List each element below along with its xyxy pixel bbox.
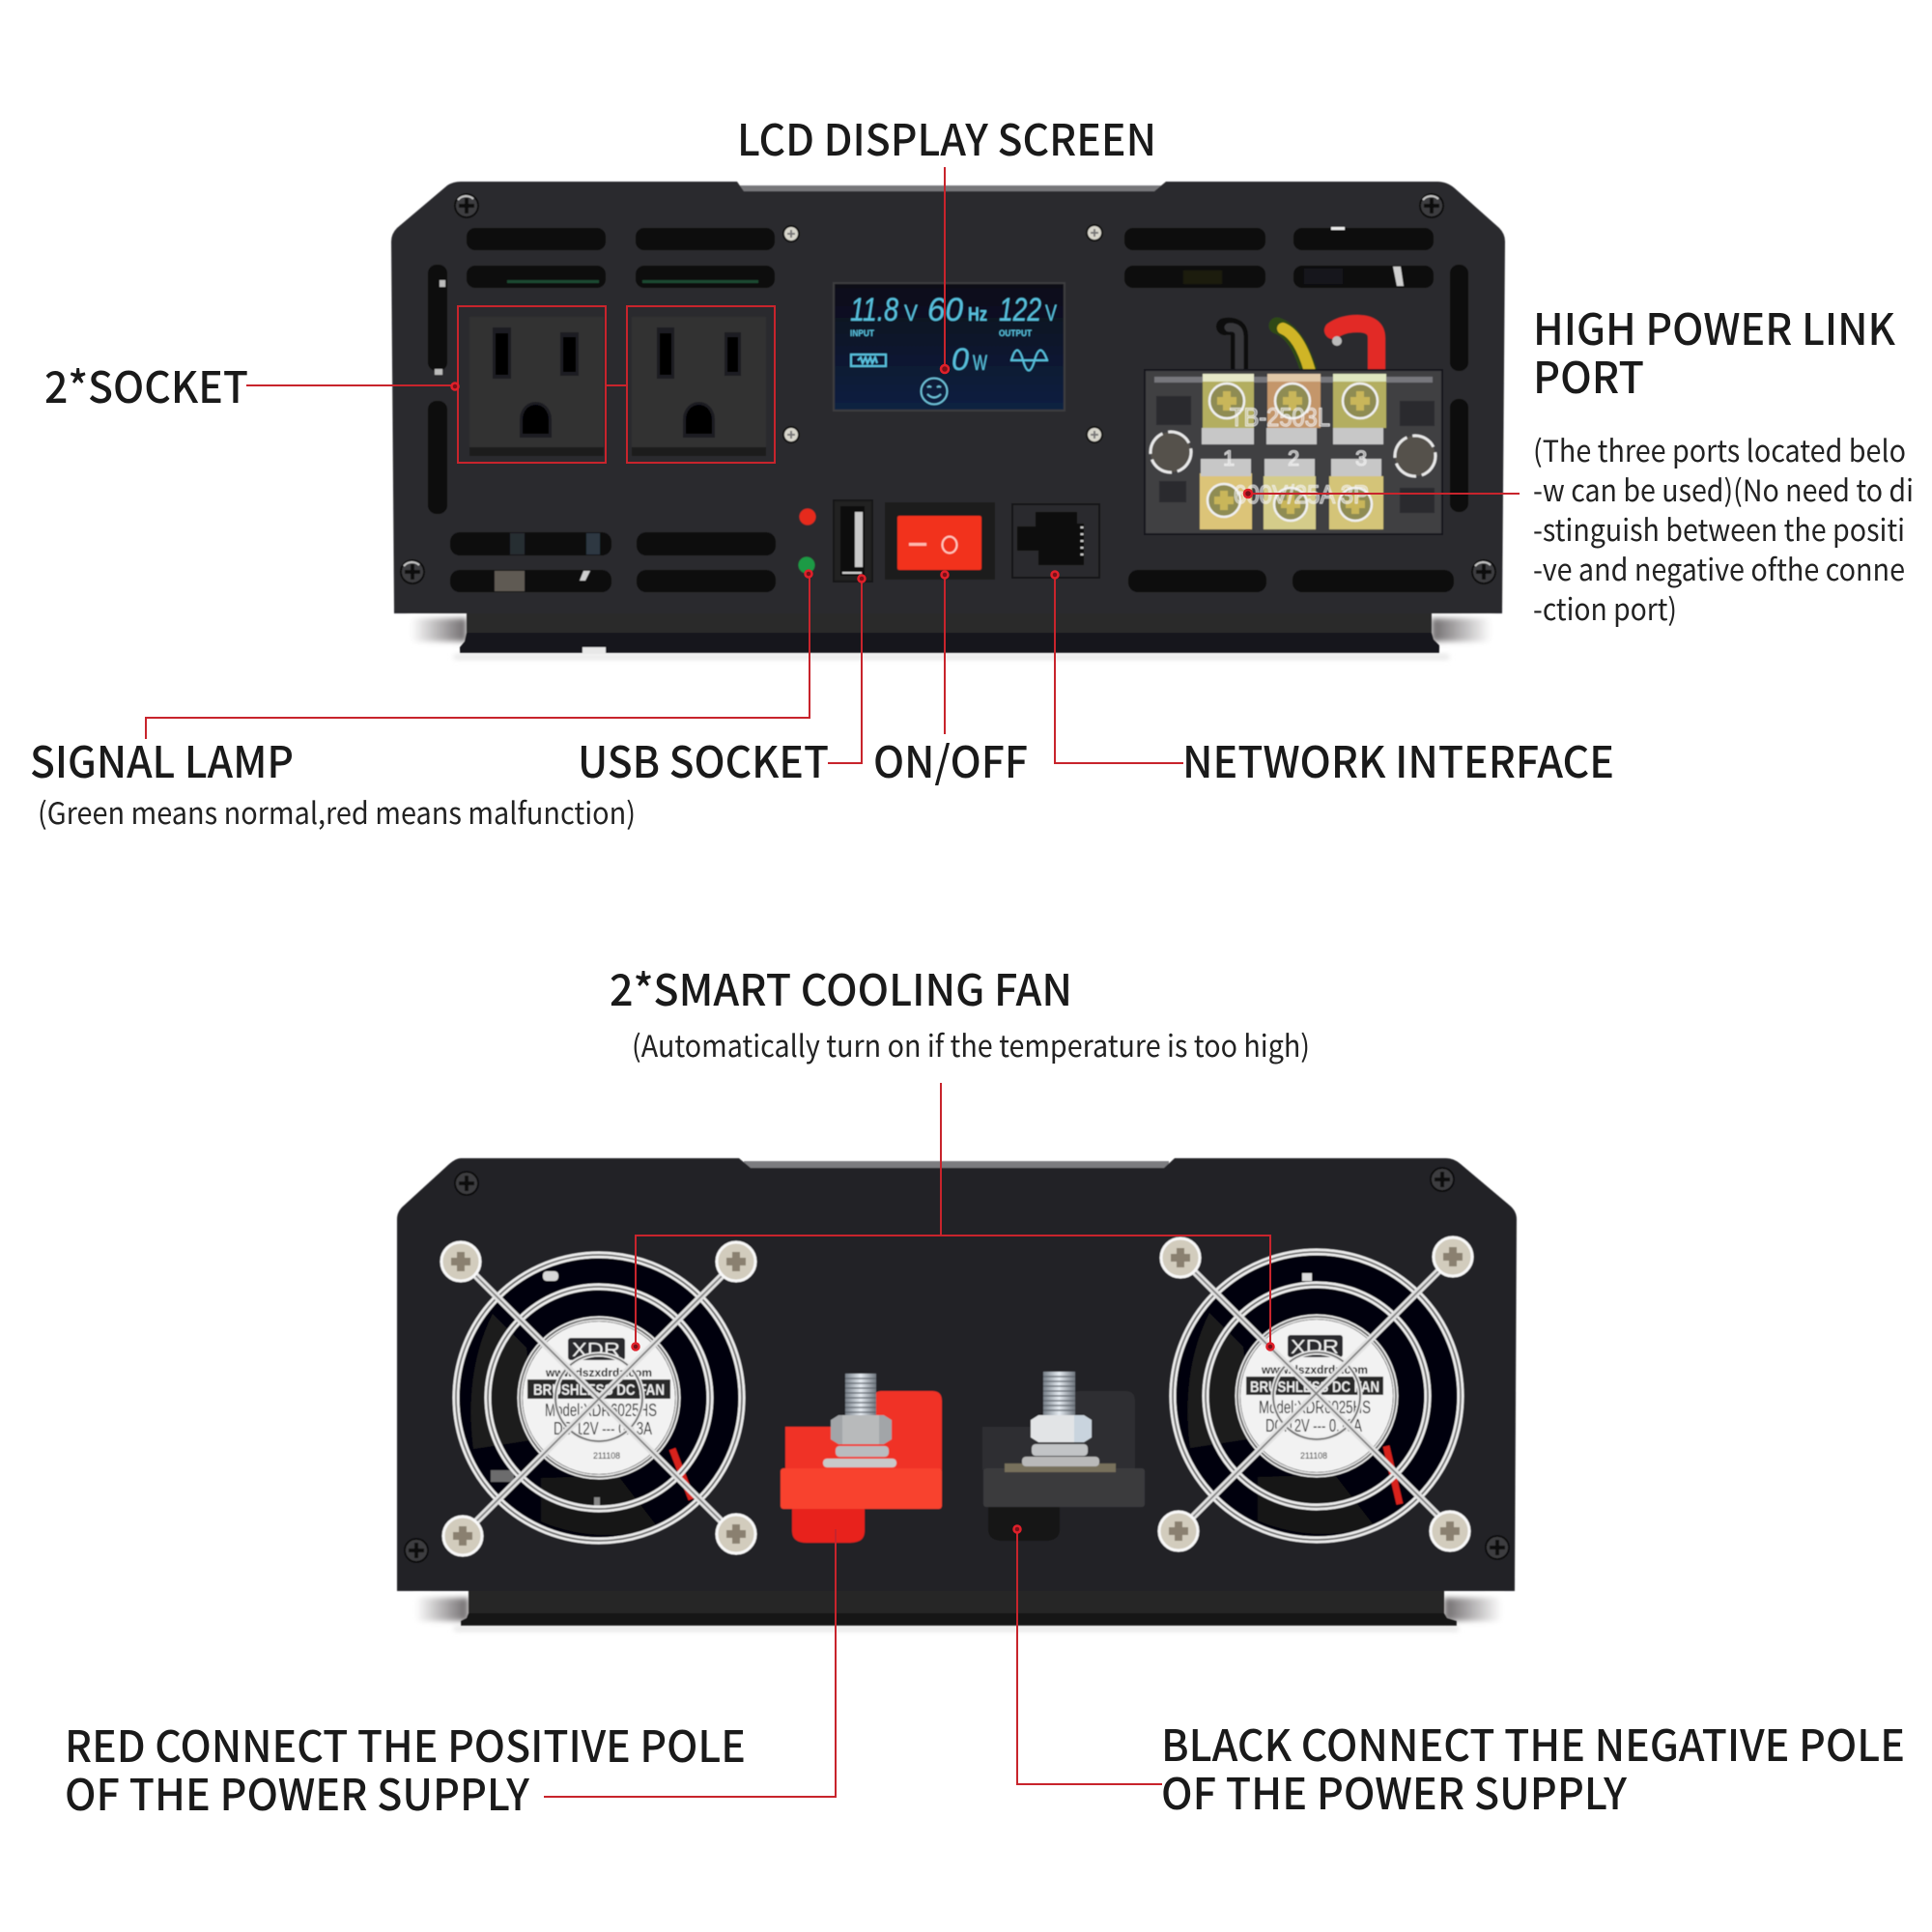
label: positive pole	[65, 1712, 746, 1823]
fan label text: XDR	[1291, 1337, 1339, 1358]
fan hub label	[523, 1321, 675, 1474]
red fan wire	[672, 1449, 692, 1499]
rear plate	[397, 1158, 1517, 1591]
note: high power link port: (The three ports located belo	[1533, 427, 1906, 470]
label: positive pole: RED CONNECT THE POSITIVE POLE	[65, 1712, 746, 1775]
cooling fan right	[1159, 1237, 1472, 1550]
label: USB socket: USB SOCKET	[578, 727, 829, 790]
fan guard wires	[473, 1273, 724, 1524]
label: high power link port	[1533, 295, 1895, 406]
LCD readings: OUTPUT	[999, 328, 1032, 338]
label: negative pole	[1161, 1711, 1905, 1822]
network port	[1012, 504, 1099, 578]
fan label text: BRUSHLESS DC FAN	[533, 1382, 665, 1399]
LCD readings: V	[904, 300, 918, 327]
fan label text: DC:12V --- 0.13A	[554, 1419, 652, 1438]
fan blades	[471, 1271, 657, 1535]
mounting base	[461, 1589, 1457, 1626]
cables	[1225, 324, 1377, 379]
fan label text: DC:12V --- 0.13A	[1265, 1416, 1362, 1435]
note: high power link port: -ve and negative ofthe conne	[1533, 546, 1905, 589]
ground shadow	[411, 618, 1492, 659]
ventilation slots	[428, 228, 1468, 592]
label: positive pole: OF THE POWER SUPPLY	[65, 1760, 530, 1823]
fan guard rings	[1173, 1252, 1461, 1540]
corner screws	[401, 194, 1495, 583]
label: signal lamp: SIGNAL LAMP	[30, 727, 294, 790]
LCD readings: INPUT	[850, 328, 874, 338]
rocker switch	[885, 502, 995, 580]
fan label text: BRUSHLESS DC FAN	[1250, 1379, 1379, 1396]
fan label text: Model:XDR6025HS	[545, 1401, 657, 1420]
icon: sine wave	[1010, 350, 1048, 371]
fan mounting screws	[1159, 1237, 1472, 1550]
fan label text	[1246, 1335, 1383, 1461]
LCD readings: Hz	[968, 304, 987, 326]
negative terminal (black)	[982, 1372, 1145, 1541]
LCD readings: 0	[952, 342, 969, 377]
AC socket right	[632, 317, 766, 456]
note: high power link port: -stinguish between the positi	[1533, 506, 1905, 550]
callout lines: rear panel	[544, 1083, 1273, 1797]
fan label text: 211108	[1300, 1451, 1327, 1461]
corner screws	[405, 1168, 1509, 1562]
label: negative pole: OF THE POWER SUPPLY	[1161, 1759, 1628, 1822]
positive terminal (red)	[781, 1374, 942, 1543]
terminal markings: 2	[1288, 446, 1299, 470]
note: high power link port	[1533, 427, 1914, 629]
label: on/off: ON/OFF	[873, 727, 1028, 790]
LCD readings: 122	[999, 292, 1041, 328]
red fan wire	[1386, 1446, 1400, 1504]
icon: battery	[851, 355, 886, 366]
mounting base	[460, 609, 1439, 654]
fan opening	[457, 1256, 741, 1540]
fan label text: www.dszxdrdz.com	[545, 1366, 652, 1379]
fan label text	[527, 1338, 670, 1461]
terminal markings: TB-2503L	[1230, 403, 1330, 432]
fan guard rings	[456, 1255, 742, 1541]
terminal markings: 3	[1355, 446, 1367, 470]
rear case strip	[739, 185, 1164, 195]
terminal markings	[1223, 403, 1369, 509]
label: high power link port: HIGH POWER LINK	[1533, 295, 1895, 357]
LCD screen	[834, 283, 1065, 411]
inverter rear panel	[397, 1158, 1517, 1631]
slot details	[435, 227, 1404, 591]
signal lamps	[798, 508, 815, 574]
fan blades	[1188, 1273, 1430, 1534]
label: negative pole: BLACK CONNECT THE NEGATIVE POLE	[1161, 1711, 1905, 1774]
label: cooling fan: 2*SMART COOLING FAN	[610, 955, 1072, 1018]
LCD readings: V	[1045, 300, 1057, 327]
note: signal lamp: (Green means normal,red means malfunction)	[38, 789, 636, 833]
fan hub label	[1240, 1320, 1393, 1472]
note: cooling fan: (Automatically turn on if the temperature is too high)	[632, 1022, 1310, 1065]
terminal markings: 600V/25A 3P	[1234, 480, 1369, 509]
front plate	[391, 182, 1505, 613]
label: LCD display screen: LCD DISPLAY SCREEN	[737, 105, 1156, 168]
LCD readings: 60	[927, 292, 963, 328]
AC socket left	[469, 317, 604, 456]
fan opening	[1174, 1253, 1460, 1539]
small screws	[783, 225, 1102, 442]
fan mounting screws	[441, 1242, 755, 1555]
LCD readings: 11.8	[850, 292, 898, 328]
note: high power link port: -ction port)	[1533, 585, 1677, 629]
cooling fan left	[441, 1242, 755, 1555]
inverter front panel	[391, 182, 1505, 659]
LCD readings	[850, 292, 1057, 377]
label: network interface: NETWORK INTERFACE	[1182, 727, 1614, 790]
fan label text: www.dszxdrdz.com	[1261, 1363, 1368, 1377]
rear case strip	[744, 1161, 1169, 1171]
fan guard wires	[1193, 1270, 1439, 1517]
terminal markings: 1	[1223, 446, 1235, 470]
LCD readings: W	[973, 351, 987, 375]
ground shadow	[415, 1598, 1502, 1631]
fan label text: 211108	[593, 1451, 620, 1461]
terminal block	[1145, 370, 1442, 534]
label: sockets: 2*SOCKET	[44, 353, 248, 415]
fan label text: XDR	[572, 1340, 620, 1361]
callout lines: front panel	[146, 167, 1520, 763]
label: high power link port: PORT	[1533, 343, 1644, 406]
fan label text: Model:XDR6025HS	[1259, 1398, 1371, 1417]
icon: smiley	[922, 379, 947, 404]
USB port	[834, 500, 872, 582]
